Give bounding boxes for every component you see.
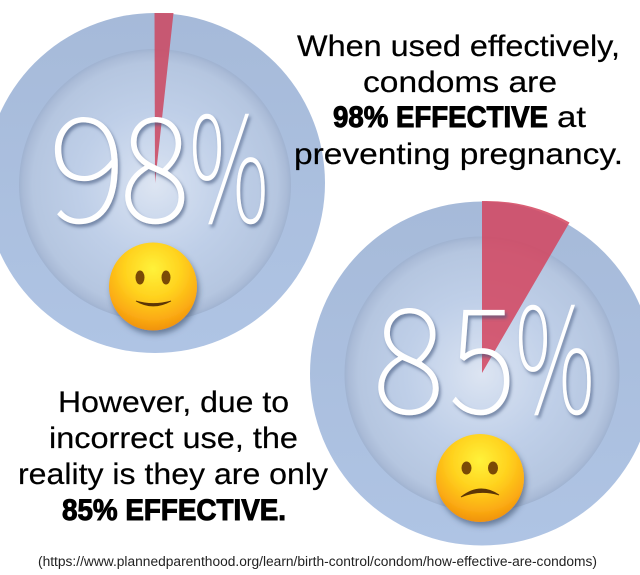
inner disc	[19, 49, 291, 321]
text block: real-world statement: However, due to	[58, 386, 289, 419]
red wedge 2 percent	[154, 13, 174, 183]
85% numeral: %	[515, 244, 595, 455]
text block: effectiveness statement: condoms are	[363, 66, 557, 99]
icon: frowning face	[436, 434, 524, 522]
icon: smiling face	[109, 242, 197, 330]
text block: effectiveness statement: at	[557, 101, 587, 134]
85% numeral: 8	[372, 245, 445, 456]
inner disc	[344, 236, 620, 512]
text block: real-world statement: reality is they are only	[18, 458, 328, 491]
text block: effectiveness statement: preventing pregnancy.	[294, 138, 623, 171]
text block: real-world statement: 85% EFFECTIVE.	[62, 494, 286, 527]
98% numeral: %	[189, 53, 269, 264]
text block: effectiveness statement: When used effectively,	[297, 30, 620, 63]
outer ring	[310, 202, 640, 546]
red wedge 15 percent	[482, 201, 570, 373]
outer ring	[0, 13, 325, 353]
98% numeral	[48, 52, 269, 264]
source citation: (https://www.plannedparenthood.org/learn/birth-control/condom/how-effective-are-condoms)	[38, 554, 597, 569]
text block: effectiveness statement: 98% EFFECTIVE	[333, 101, 548, 134]
85% numeral	[372, 243, 595, 456]
panel: 85% gauge	[310, 201, 640, 546]
text block: effectiveness statement	[294, 30, 623, 171]
panel: 98% gauge	[0, 13, 325, 353]
98% numeral: 8	[120, 52, 190, 264]
text block: real-world statement	[18, 386, 328, 527]
text block: real-world statement: incorrect use, the	[49, 422, 298, 455]
98% numeral: 9	[48, 53, 126, 264]
85% numeral: 5	[449, 243, 516, 455]
